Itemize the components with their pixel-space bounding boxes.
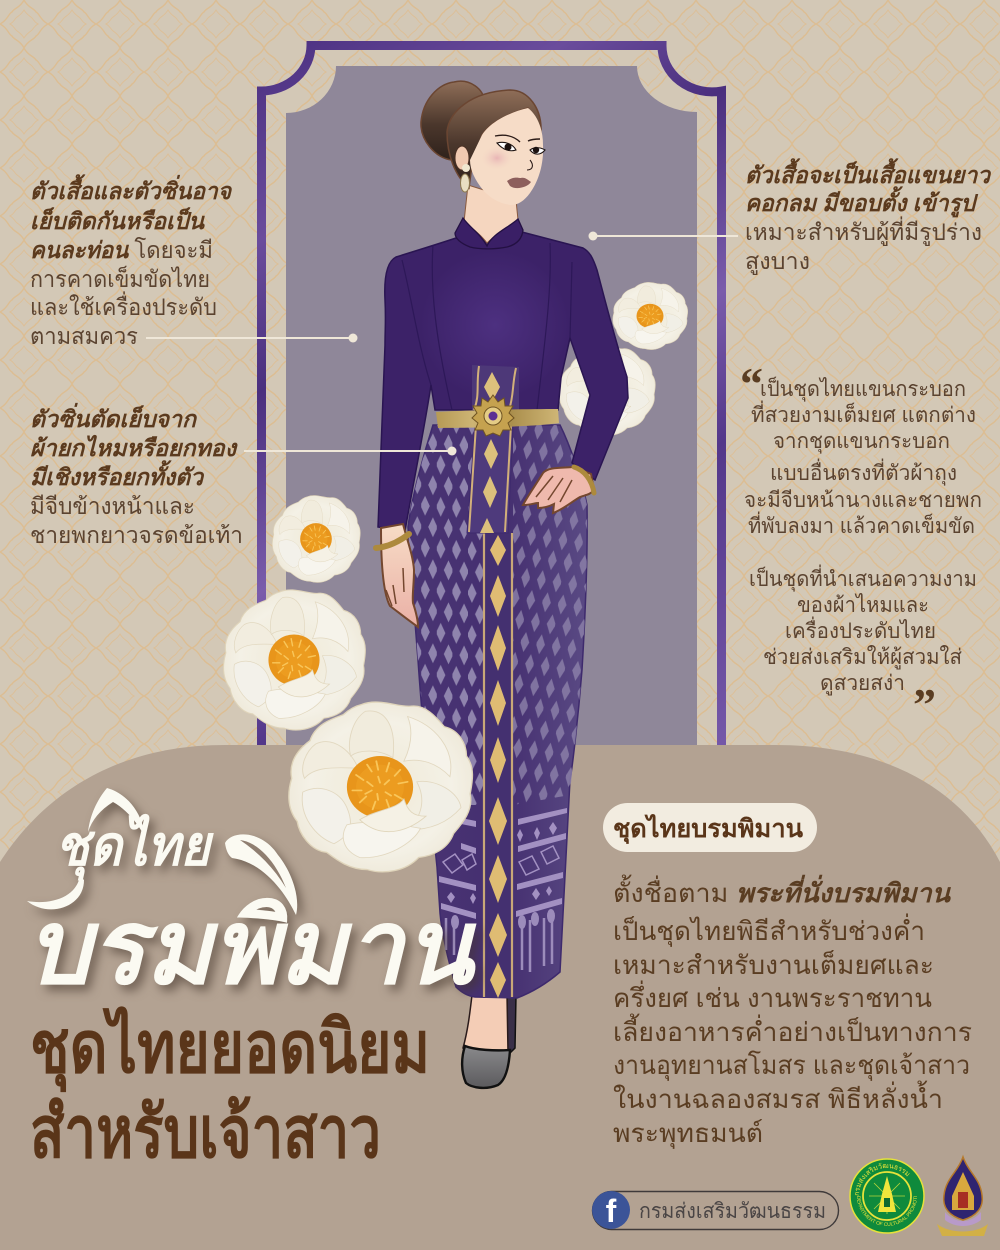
text: skirt: ผ้ายกไหมหรือยกทอง	[30, 434, 238, 461]
description text: พระพุทธมนต์	[613, 1118, 763, 1149]
flowers left	[224, 496, 365, 730]
taupe bottom area	[0, 745, 1000, 1250]
text: bodice and skirt	[30, 174, 232, 349]
description text: ในงานฉลองสมรส พิธีหลั่งน้ำ	[613, 1080, 943, 1114]
blush	[480, 145, 514, 171]
description text: ตั้งชื่อตาม พระที่นั่งบรมพิมาน	[613, 874, 951, 908]
back leg and shoe	[507, 996, 516, 1056]
text: skirt: มีเชิงหรือยกทั้งตัว	[30, 460, 205, 490]
skirt	[405, 425, 593, 998]
text: upper right: คอกลม มีขอบตั้ง เข้ารูป	[745, 186, 978, 218]
callout line: skirt	[244, 446, 456, 456]
description text: เป็นชุดไทยพิธีสำหรับช่วงค่ำ	[613, 913, 925, 947]
text: upper right: สูงบาง	[745, 248, 810, 275]
grey-violet panel	[286, 66, 697, 745]
pill heading	[603, 803, 817, 852]
quote text: จะมีจีบหน้านางและชายพก	[744, 489, 982, 512]
hair bun	[421, 81, 484, 160]
facebook pill	[592, 1191, 838, 1230]
front leg	[463, 995, 508, 1052]
ear	[455, 146, 469, 170]
quote text	[744, 375, 982, 696]
quote text: ดูสวยสง่า	[820, 672, 905, 696]
text: bodice and skirt: และใช้เครื่องประดับ	[30, 291, 217, 320]
callout line: upper right	[588, 232, 738, 240]
pill heading: ชุดไทยบรมพิมาน	[613, 813, 803, 845]
main title	[26, 788, 477, 1006]
text: bodice and skirt: เย็บติดกันหรือเป็น	[30, 207, 205, 234]
eyes and brows	[495, 135, 545, 154]
quote text: ช่วยส่งเสริมให้ผู้สวมใส่	[763, 645, 962, 670]
shoe	[462, 1046, 510, 1088]
quote text: ของผ้าไหมและ	[797, 593, 929, 617]
bodice seams	[402, 243, 572, 410]
text: skirt: ชายพกยาวจรดข้อเท้า	[30, 522, 243, 548]
logo: department of cultural promotion: DEPARTMENT OF CULTURAL PROMOTION	[857, 1196, 917, 1226]
quote text: แบบอื่นตรงที่ตัวผ้าถุง	[770, 458, 957, 486]
purple decorative frame	[262, 46, 722, 745]
title line: ชุดไทย: ชุดไทย	[55, 813, 214, 881]
quote mark open: “	[740, 358, 763, 409]
quote mark close: ”	[913, 679, 936, 730]
centre panel with gold stripes	[483, 533, 513, 998]
earring	[460, 164, 470, 192]
text: bodice and skirt: การคาดเข็มขัดไทย	[30, 264, 210, 292]
text: skirt	[30, 402, 243, 548]
title swooshes	[27, 788, 297, 915]
quote text: เป็นชุดไทยแขนกระบอก	[760, 375, 966, 402]
chai phok fold	[467, 425, 513, 533]
title line: บรมพิมาน: บรมพิมาน	[26, 890, 477, 1006]
text: bodice and skirt: คนละท่อน โดยจะมี	[30, 237, 213, 263]
facebook icon	[592, 1191, 630, 1229]
quote text: ที่พับลงมา แล้วคาดเข็มขัด	[748, 511, 975, 538]
description text: เลี้ยงอาหารค่ำอย่างเป็นทางการ	[613, 1013, 972, 1047]
description text: เหมาะสำหรับงานเต็มยศและ	[613, 949, 934, 980]
figure in purple Thai dress	[376, 81, 628, 1088]
collar	[455, 218, 523, 249]
logo: ministry of culture	[937, 1157, 988, 1236]
facebook pill: กรมส่งเสริมวัฒนธรรม	[639, 1200, 826, 1223]
face	[470, 108, 543, 205]
belt front panel	[472, 365, 519, 410]
text: skirt: มีจีบข้างหน้าและ	[30, 493, 195, 519]
facebook icon: f	[606, 1193, 617, 1229]
quote text: จากชุดแขนกระบอก	[773, 430, 950, 454]
gold medallion	[472, 395, 514, 436]
gold belt	[436, 409, 559, 428]
skirt border bands	[439, 808, 567, 919]
callout line: upper left	[146, 334, 358, 342]
quote text: เครื่องประดับไทย	[785, 616, 936, 643]
description text	[613, 874, 972, 1149]
nose	[527, 160, 532, 170]
logo: department of cultural promotion: กรมส่งเสริมวัฒนธรรม	[855, 1162, 910, 1196]
flowers behind arm	[559, 282, 688, 435]
text: bodice and skirt: ตัวเสื้อและตัวซิ่นอาจ	[30, 174, 232, 204]
subtitle: สำหรับเจ้าสาว	[30, 1093, 381, 1173]
text: bodice and skirt: ตามสมควร	[30, 323, 138, 349]
left hand	[381, 524, 418, 627]
hair	[447, 90, 541, 188]
text: upper right	[745, 158, 992, 275]
subtitle: ชุดไทยยอดนิยม	[30, 1005, 430, 1093]
description text: งานอุทยานสโมสร และชุดเจ้าสาว	[613, 1050, 970, 1081]
large flower foreground	[289, 702, 472, 872]
bodice and sleeves	[378, 232, 628, 531]
text: upper right: ตัวเสื้อจะเป็นเสื้อแขนยาว	[745, 158, 992, 188]
text: upper right: เหมาะสำหรับผู้ที่มีรูปร่าง	[745, 216, 982, 246]
lips	[507, 178, 531, 188]
right bangle	[574, 467, 594, 493]
right hand	[523, 467, 594, 513]
neck	[464, 185, 518, 243]
left bangle	[376, 534, 409, 548]
quote text: เป็นชุดที่นำเสนอความงาม	[749, 564, 977, 592]
description text: ครึ่งยศ เช่น งานพระราชทาน	[613, 980, 932, 1013]
subtitle	[30, 1005, 430, 1173]
quote text: ที่สวยงามเต็มยศ แตกต่าง	[751, 400, 976, 427]
text: skirt: ตัวซิ่นตัดเย็บจาก	[30, 402, 198, 432]
